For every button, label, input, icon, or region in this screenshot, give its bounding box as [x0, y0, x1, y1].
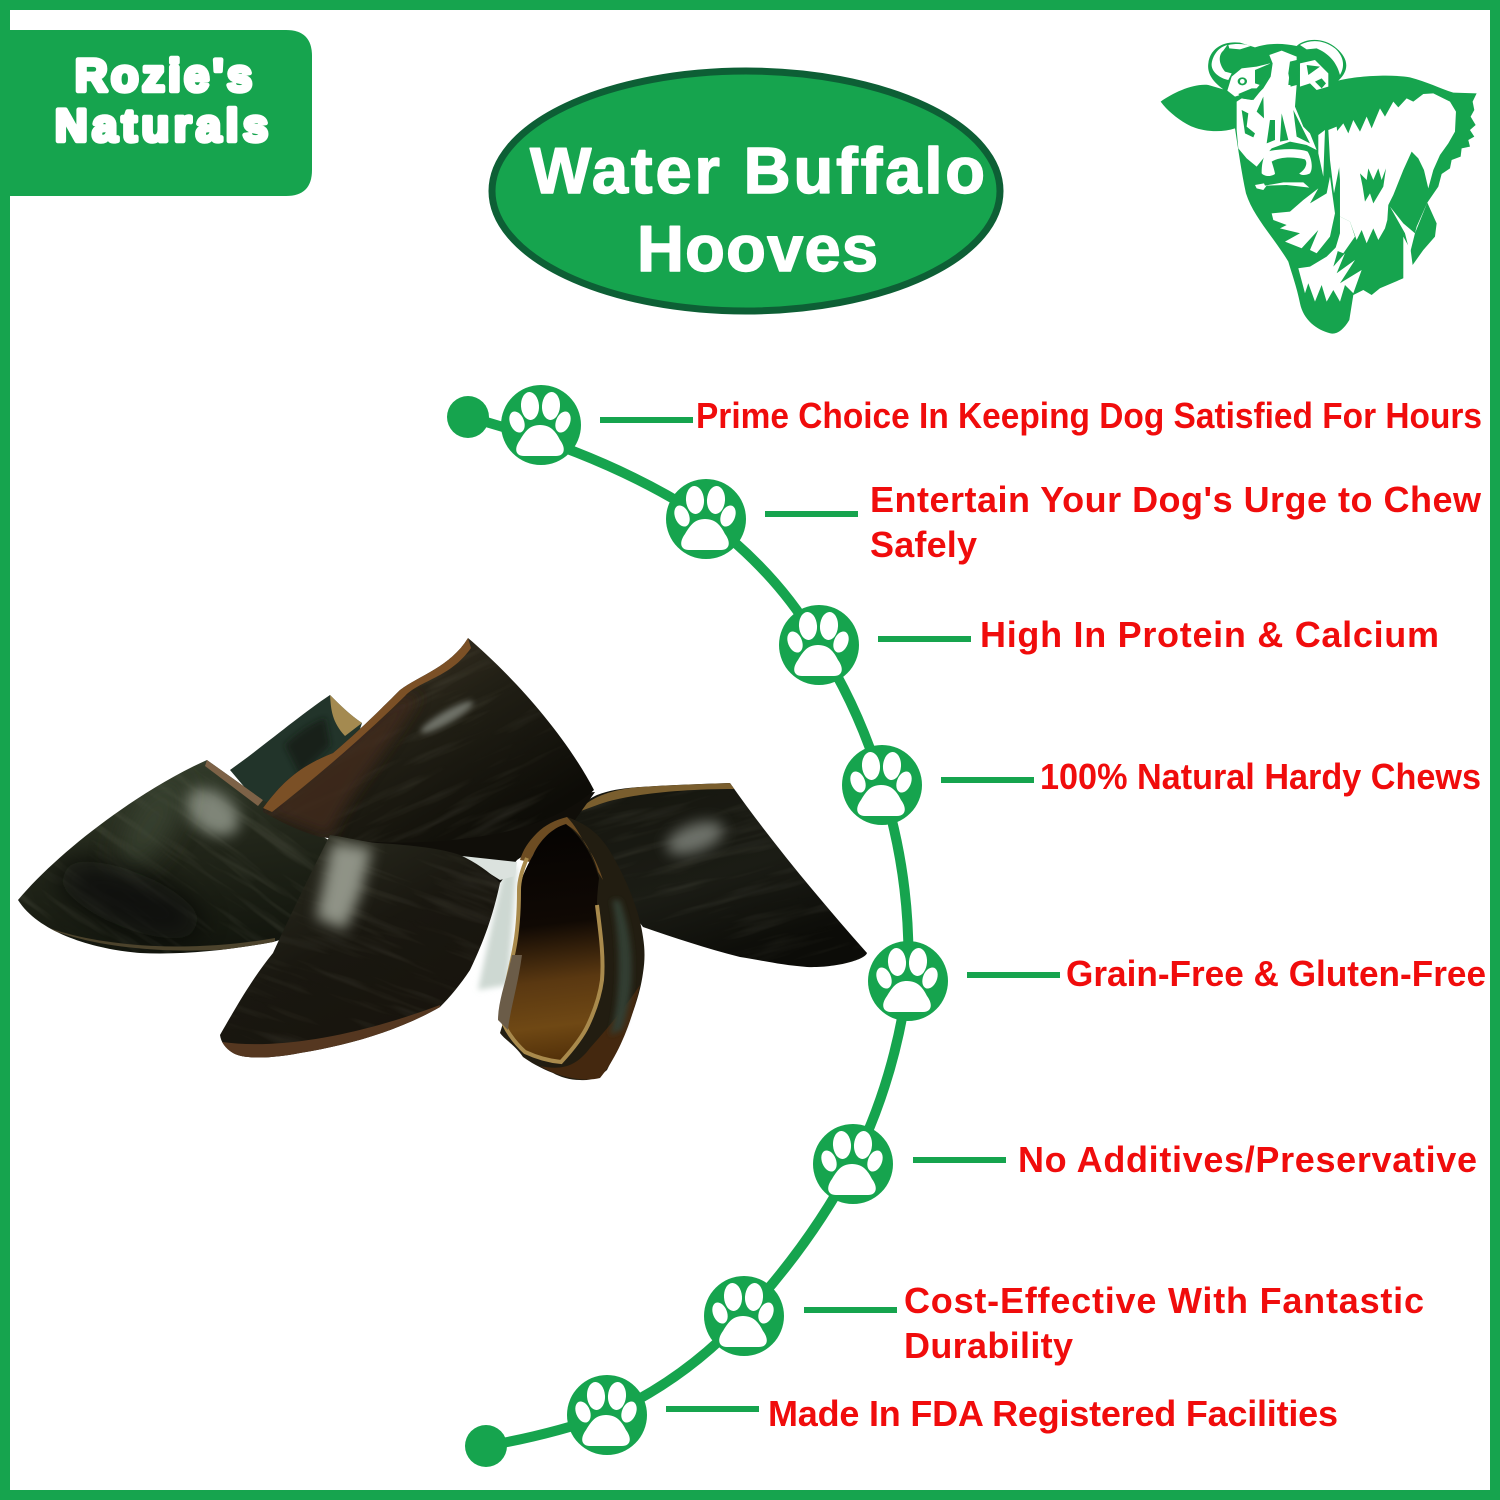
cow jowl white fur: [1272, 177, 1335, 253]
hoof: under center dark: [265, 792, 595, 883]
benefit 8: Made In FDA Registered Facilities: [768, 1393, 1338, 1434]
cup rim grey wear: [498, 955, 522, 1030]
title oval: [492, 71, 1000, 311]
logo badge: Rozie's: [75, 50, 252, 101]
logo badge: Naturals: [55, 100, 268, 151]
hoof: center top: [263, 638, 594, 842]
cow right eye patch: [1300, 60, 1328, 90]
benefit 6: No Additives/Preservative: [1018, 1139, 1477, 1180]
cow right eye: [1307, 65, 1326, 88]
cup top rim brown: [520, 817, 603, 880]
cow right horn: [1300, 41, 1343, 75]
title oval: Hooves: [637, 212, 878, 285]
photo: water buffalo hooves: [0, 524, 946, 1159]
benefit 5: Grain-Free & Gluten-Free: [1066, 953, 1486, 994]
hoof: left: [18, 760, 328, 954]
hoof: back left: [230, 695, 362, 815]
hoof shadow: [478, 866, 517, 990]
cup rim tan: [502, 858, 603, 1062]
cow left eye: [1238, 63, 1271, 100]
benefit 7: Cost-Effective With Fantastic: [904, 1280, 1424, 1321]
timeline curve: [468, 417, 908, 1446]
hoof: pale gap under center: [462, 856, 517, 880]
benefit 1: [501, 385, 1482, 465]
hoof: right: [574, 783, 867, 968]
logo badge: [10, 30, 312, 196]
cow silhouette: [1161, 40, 1477, 334]
benefit 8: [567, 1375, 1338, 1455]
cup interior: [503, 824, 603, 1062]
benefit 4: 100% Natural Hardy Chews: [1040, 756, 1481, 797]
benefit 7: [704, 1276, 1424, 1366]
cow shoulder dark fur: [1360, 168, 1386, 203]
cow left brow: [1227, 63, 1270, 97]
benefit 7: Durability: [904, 1325, 1073, 1366]
cup green sheen: [610, 900, 632, 1035]
cow neck fur streaks: [1318, 127, 1367, 193]
benefit 5: [868, 941, 1486, 1021]
cup lower brown: [540, 985, 640, 1080]
icon: cow head: [1161, 40, 1477, 334]
benefit 2: Entertain Your Dog's Urge to Chew: [870, 479, 1482, 520]
cow face white: [1237, 51, 1317, 167]
benefit 3: [779, 605, 1439, 685]
cow lower chest white fur: [1298, 243, 1362, 302]
cow neck connection white: [1335, 217, 1355, 253]
hoof: front left: [220, 835, 500, 1058]
cup shell: [500, 817, 644, 1080]
cow left horn: [1212, 44, 1251, 80]
timeline start dot: [447, 396, 489, 438]
cow mouth line: [1255, 182, 1309, 190]
cow shoulder white: [1337, 93, 1456, 243]
cow leg white sliver: [1390, 203, 1427, 253]
benefit 2: Safely: [870, 524, 977, 565]
benefit 4: [842, 745, 1481, 825]
timeline end dot: [465, 1425, 507, 1467]
cow face stripes: [1242, 68, 1310, 143]
title oval: Water Buffalo: [530, 134, 985, 207]
benefit 2: [666, 479, 1482, 565]
benefit 6: [813, 1124, 1477, 1204]
cow muzzle: [1262, 149, 1312, 176]
hoof: open cup: [498, 817, 644, 1080]
benefit 3: High In Protein & Calcium: [980, 614, 1439, 655]
